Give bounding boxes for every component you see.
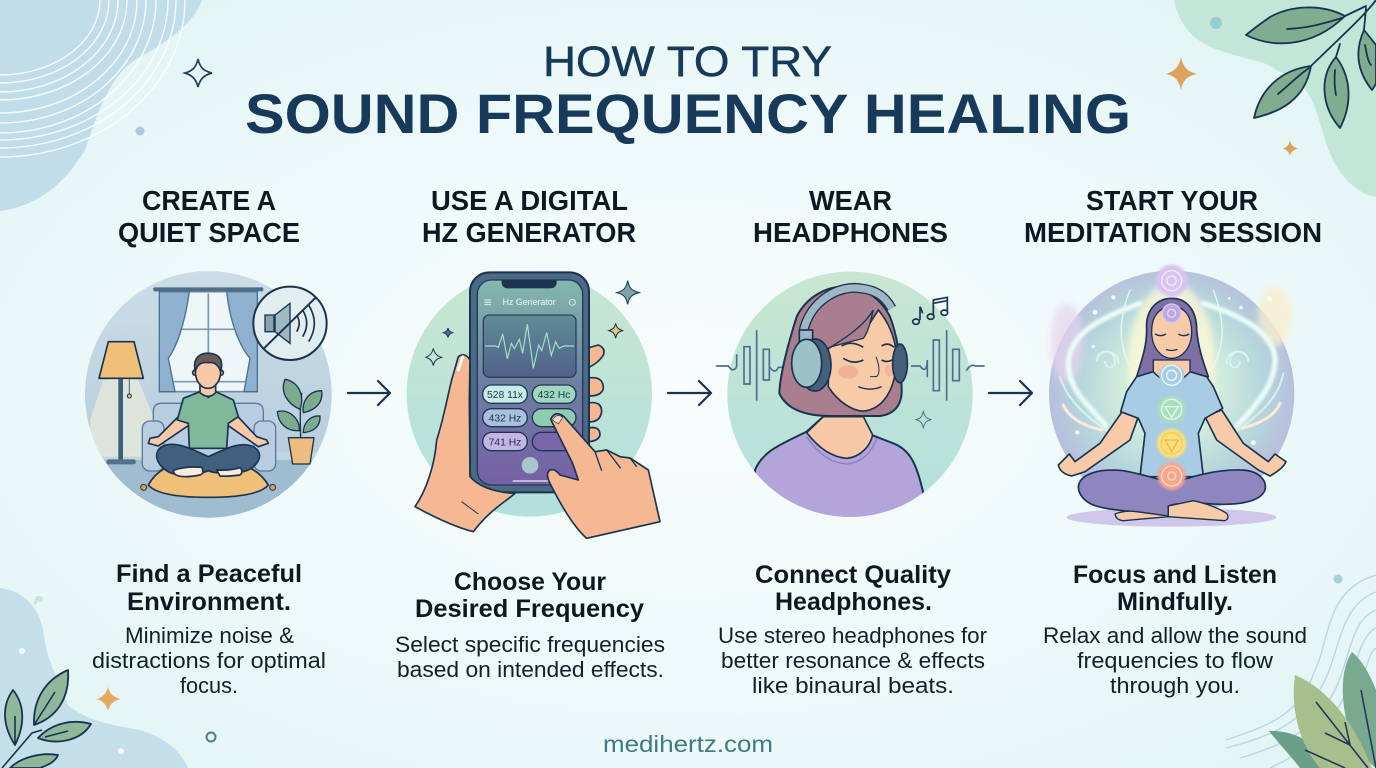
title: SOUND FREQUENCY HEALING [245, 82, 1131, 145]
sparkles [426, 281, 639, 366]
step 4 heading [1024, 185, 1322, 248]
step 4 heading: MEDITATION SESSION [1024, 217, 1322, 248]
arms [1058, 410, 1286, 476]
step 1 description: Minimize noise & [125, 623, 294, 648]
chakras [1156, 265, 1188, 490]
face [1152, 307, 1192, 358]
decoration: bottom-right wave lines and leaves [1226, 574, 1376, 768]
step 3 description: better resonance & effects [721, 648, 985, 673]
sofa [153, 403, 263, 460]
face [828, 310, 897, 411]
plant [277, 379, 322, 464]
step 1 description: focus. [180, 673, 238, 698]
step 4 description: through you. [1110, 673, 1240, 698]
step 2 description: Select specific frequencies [395, 632, 665, 657]
person [148, 353, 268, 477]
decoration: gold sparkles top-right [1166, 57, 1298, 156]
step 3 description: Headphones. [775, 588, 932, 616]
sound waves [717, 331, 984, 400]
left hand [415, 355, 515, 532]
step 4 description: frequencies to flow [1077, 648, 1274, 673]
step 2 description: Desired Frequency [415, 595, 644, 623]
music notes [913, 297, 948, 324]
title [245, 38, 1131, 145]
decoration: top-left blob with rings [0, 0, 202, 211]
arrow 2 [668, 381, 711, 405]
mute icon [253, 287, 327, 360]
step 3 heading: WEAR [809, 185, 892, 216]
shirt [1121, 372, 1223, 477]
step 4 description [1043, 561, 1307, 698]
illustration: quiet space [80, 271, 340, 527]
step 3 description: like binaural beats. [752, 673, 954, 698]
right hand [547, 414, 660, 538]
step 2 description: Choose Your [454, 568, 606, 596]
step 2 heading [422, 185, 636, 248]
step 4 description: Focus and Listen [1073, 561, 1277, 589]
step 3 heading [753, 185, 948, 248]
step 3 description [718, 561, 987, 698]
illustration: meditation session [1049, 265, 1294, 527]
decoration: sparkle top-left [185, 59, 212, 87]
step 1 heading: QUIET SPACE [118, 217, 300, 248]
step 4 description: Mindfully. [1117, 588, 1233, 616]
illustration: phone with Hz generator: 432 Hc [538, 390, 570, 401]
footer url: medihertz.com [603, 731, 773, 757]
step 1 heading [118, 185, 300, 248]
step 1 heading: CREATE A [142, 185, 276, 216]
step 4 heading: START YOUR [1086, 185, 1258, 216]
phone [470, 272, 589, 492]
decoration: bottom-left blob with leaves [0, 588, 216, 768]
decoration: top-right blob with leaves [1174, 0, 1376, 197]
arrow 1 [348, 381, 390, 405]
illustration: wearing headphones [717, 272, 984, 523]
arrow 3 [989, 381, 1032, 405]
energy swirls [1060, 290, 1283, 433]
cushion [148, 464, 268, 497]
illustration: phone with Hz generator: 432 Hz [489, 414, 521, 425]
step 2 heading: HZ GENERATOR [422, 217, 636, 248]
fingers behind phone [587, 345, 604, 442]
step 3 heading: HEADPHONES [753, 217, 948, 248]
ground shadow [1067, 508, 1277, 527]
step 3 description: Use stereo headphones for [718, 623, 987, 648]
step 2 description [395, 568, 665, 682]
hair [779, 287, 902, 416]
step 2 description: based on intended effects. [397, 657, 664, 682]
step 1 description: Find a Peaceful [116, 560, 302, 588]
illustration: phone with Hz generator: Hz Generator [503, 297, 556, 307]
illustration: phone with Hz generator [407, 271, 660, 538]
hair [1137, 298, 1208, 377]
step 1 description: Environment. [127, 588, 291, 616]
step 1 description: distractions for optimal [92, 648, 326, 673]
title: HOW TO TRY [543, 38, 832, 86]
step 2 heading: USE A DIGITAL [431, 185, 628, 216]
step 4 description: Relax and allow the sound [1043, 623, 1307, 648]
step 1 description [92, 560, 326, 698]
headphones [803, 288, 892, 332]
step 3 description: Connect Quality [755, 561, 951, 589]
illustration: phone with Hz generator: 528 11x [487, 390, 524, 401]
illustration: phone with Hz generator: 741 Hz [489, 437, 521, 448]
legs [1078, 470, 1265, 517]
